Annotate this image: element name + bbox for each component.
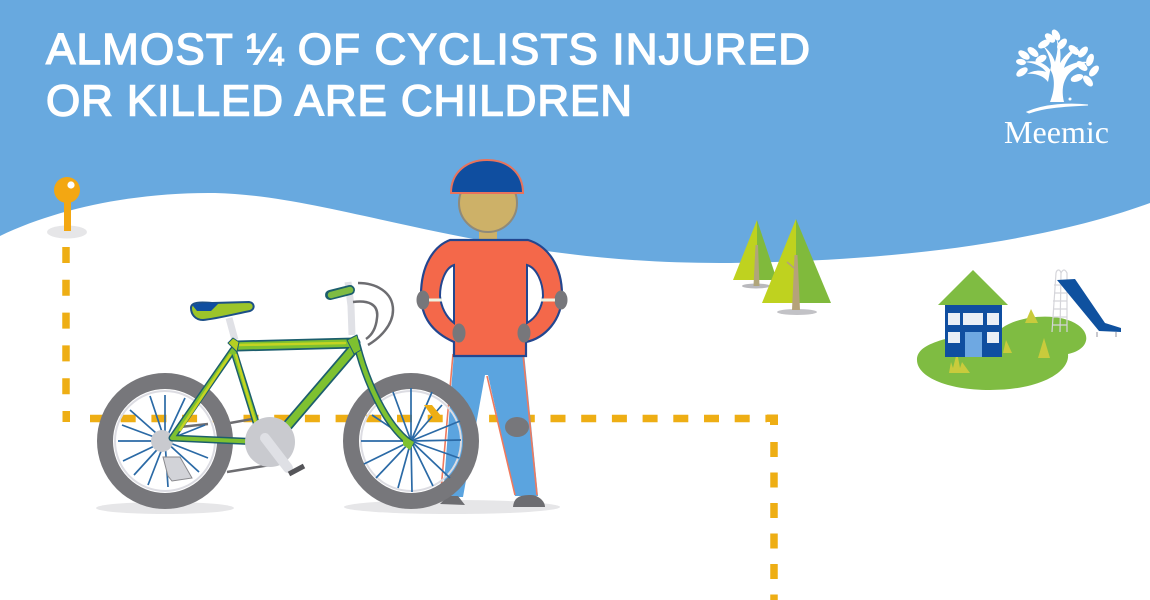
logo: Meemic tree	[1004, 28, 1109, 150]
chain	[180, 418, 270, 472]
handlebar grip	[330, 290, 350, 295]
playground scene	[917, 270, 1121, 390]
frame	[172, 335, 414, 450]
child cyclist	[416, 160, 568, 507]
frame colour	[172, 343, 410, 443]
frame outlines	[172, 343, 410, 443]
arm gaps	[440, 265, 454, 323]
grass	[917, 317, 1086, 390]
trees	[733, 219, 831, 315]
elbow pads and gloves	[416, 290, 568, 342]
slide	[1052, 270, 1121, 337]
legs	[443, 352, 538, 497]
house	[938, 270, 1008, 357]
grass tufts	[949, 309, 1050, 373]
rear wheel	[105, 381, 225, 501]
logo wordmark: Meemic	[1004, 114, 1109, 150]
seat post and handlebar stem	[229, 282, 352, 340]
dashed route	[62, 247, 778, 600]
front wheel	[351, 381, 471, 501]
neck	[479, 228, 497, 242]
shoes	[513, 495, 545, 507]
helmet	[451, 160, 523, 193]
torso and arms	[421, 240, 562, 356]
title: ALMOST ¼ OF CYCLISTS INJURED	[46, 25, 810, 74]
crank and pedal	[245, 417, 304, 474]
bicycle	[105, 282, 471, 501]
tree right	[762, 219, 831, 315]
ground shadows	[96, 500, 560, 514]
joints	[228, 338, 239, 352]
saddle	[191, 302, 254, 320]
tree left	[733, 220, 777, 288]
knee pad	[505, 417, 529, 437]
head	[459, 174, 517, 232]
title: OR KILLED ARE CHILDREN	[46, 76, 632, 126]
sky background wave	[0, 0, 1150, 263]
title	[46, 25, 810, 126]
location pin	[47, 177, 87, 238]
brake cables and handlebars	[353, 283, 393, 345]
